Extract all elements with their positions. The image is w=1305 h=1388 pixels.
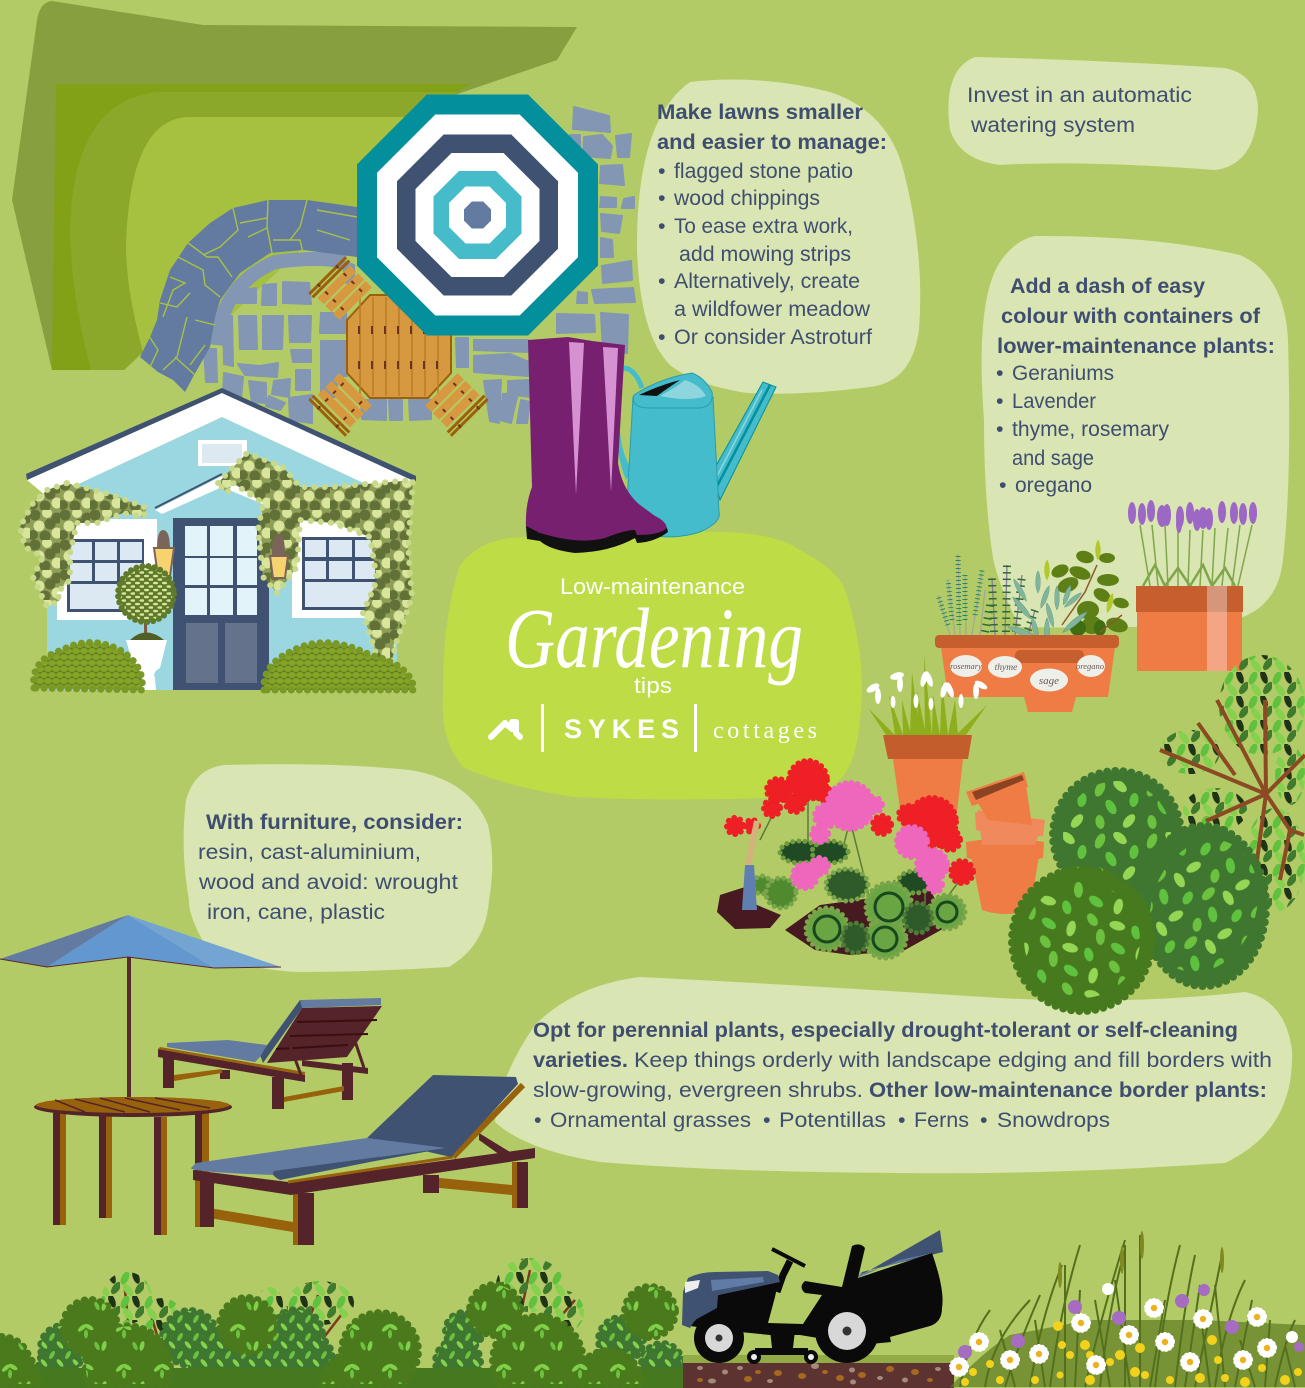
panel: perennial plants tip: •: [763, 1108, 771, 1132]
lawns list: •: [658, 186, 666, 210]
lawns heading: and easier to manage:: [657, 130, 887, 154]
sage: [1007, 571, 1089, 651]
logo: Sykes cottages: cottages: [713, 718, 817, 744]
shrub top: [1053, 771, 1181, 899]
ivy left: [20, 483, 147, 607]
soil: [717, 887, 950, 955]
illustration: rear sun lounger: [158, 998, 382, 1109]
panel: perennial plants tip: Snowdrops: [997, 1108, 1110, 1132]
foliage rosettes: [753, 841, 965, 958]
containers list: oregano: [1015, 473, 1092, 497]
containers list: Lavender: [1012, 389, 1096, 413]
lawns heading: [657, 100, 887, 154]
lawns list: Or consider Astroturf: [674, 325, 872, 349]
herb labels: oregano: [1076, 661, 1104, 671]
mower deck: [755, 1330, 808, 1355]
illustration: cottage: [20, 388, 416, 690]
lawn layers: [12, 1, 577, 370]
lawns list: add mowing strips: [679, 242, 851, 266]
trowel: [742, 821, 757, 910]
illustration: front sun lounger: [191, 1075, 535, 1245]
panel: furniture tip: resin, cast-aluminium,: [198, 840, 421, 864]
panel: perennial plants tip: [495, 977, 1292, 1173]
panel: watering system tip: watering system: [970, 113, 1135, 137]
door: [173, 518, 269, 690]
illustration: stacked terracotta pots: [966, 772, 1045, 914]
mower body: [690, 1244, 943, 1345]
panel: perennial plants tip: Ferns: [914, 1108, 969, 1132]
thyme: [985, 565, 1035, 635]
back bushes: [39, 1310, 682, 1384]
herb labels: [950, 655, 1105, 692]
lawns list: a wildfower meadow: [674, 297, 870, 321]
panel: perennial plants tip: •: [898, 1108, 906, 1132]
paving: pale stones: [204, 107, 635, 423]
oregano: [1049, 549, 1130, 636]
mower hood: [682, 1271, 780, 1328]
panel: furniture tip: iron, cane, plastic: [207, 900, 385, 924]
panel: furniture tip: With furniture, consider:: [206, 810, 463, 834]
lawns list: •: [658, 214, 666, 238]
lawns list: •: [658, 269, 666, 293]
garden table: [34, 1097, 232, 1235]
mower wheels: [694, 1299, 879, 1364]
lawns list: Alternatively, create: [674, 269, 860, 293]
panel: perennial plants tip: Ornamental grasses: [550, 1108, 751, 1132]
containers list: •: [996, 361, 1004, 385]
steering wheel: [772, 1249, 805, 1292]
daisies: [952, 1283, 1298, 1374]
herb labels: sage: [1039, 675, 1059, 687]
lantern right: [270, 534, 288, 578]
illustration: parasol and table: [0, 915, 281, 1235]
icon: wellington boots: [526, 337, 668, 553]
lawns list: •: [658, 159, 666, 183]
containers heading: Add a dash of easy: [1010, 274, 1205, 298]
illustration: ground strip: [683, 1355, 954, 1388]
illustration: tree: [1160, 655, 1305, 912]
meadow grasses: [960, 1235, 1295, 1387]
back bush leaves: [39, 1310, 682, 1384]
stems: [760, 790, 960, 905]
script title: Gardening: [505, 590, 803, 686]
terracotta trough: [941, 647, 1115, 697]
containers list: Geraniums: [1012, 361, 1114, 385]
lawns heading: Make lawns smaller: [657, 100, 864, 124]
panel: perennial plants tip: •: [534, 1108, 542, 1132]
containers list: •: [996, 389, 1004, 413]
shrubs at cottage front: [34, 642, 414, 690]
herb labels: rosemary: [950, 661, 982, 671]
logo: Sykes cottages: [491, 704, 817, 752]
panel: perennial plants tip: Opt for perennial plants, especially drought-tolerant or self-cleaning: [533, 1018, 1238, 1042]
shrub right: [1132, 824, 1276, 988]
title text: Low-maintenance: [560, 574, 745, 599]
illustration: snowdrops in pot: [865, 655, 989, 830]
panel: perennial plants tip: •: [980, 1108, 988, 1132]
panel: containers tip: [982, 236, 1289, 628]
red blooms: [727, 761, 973, 883]
containers heading: [997, 274, 1275, 358]
illustration: herb pots: [935, 540, 1130, 712]
ivy right: [218, 453, 413, 668]
panel: perennial plants tip: Other low-maintenance border plants:: [869, 1078, 1267, 1102]
parasol: [0, 915, 281, 1103]
containers list: and sage: [1012, 446, 1094, 470]
illustration: bottom hedge: [0, 1258, 683, 1388]
left window: [57, 519, 157, 620]
panel: watering system tip: Invest in an automatic: [967, 83, 1192, 107]
illustration: lavender in square pot: [1128, 500, 1257, 671]
containers heading: lower-maintenance plants:: [997, 334, 1275, 358]
title panel: [443, 532, 862, 800]
patio chairs: [308, 256, 489, 437]
right window: [292, 520, 390, 618]
panel: furniture tip: [184, 764, 492, 972]
yellow flowers: [961, 1321, 1302, 1387]
containers list: •: [999, 473, 1007, 497]
containers heading: colour with containers of: [1001, 304, 1261, 328]
shrub front: [1005, 863, 1159, 1017]
panel: watering system tip: [948, 57, 1258, 170]
illustration: wildflower meadow: [950, 1231, 1305, 1387]
front bush leaves: [0, 1285, 675, 1384]
hedge base: [0, 1368, 683, 1388]
patio table: [347, 295, 451, 398]
roof: [26, 388, 416, 514]
lawns list: To ease extra work,: [674, 214, 853, 238]
illustration: geraniums: [717, 761, 973, 958]
lawns list: wood chippings: [673, 186, 820, 210]
containers list: thyme, rosemary: [1012, 417, 1169, 441]
lawns list: flagged stone patio: [674, 159, 853, 183]
containers list: [996, 361, 1169, 497]
lounger frame: [193, 1085, 535, 1245]
panel: perennial plants tip: varieties.: [533, 1048, 628, 1072]
containers list: •: [996, 417, 1004, 441]
topiary in white urn: [118, 566, 174, 690]
patio umbrella seen from above: [357, 94, 598, 336]
lounger cushions: [367, 1075, 518, 1157]
icon: watering can: [618, 368, 776, 537]
panel: perennial plants tip: slow-growing, evergreen shrubs.: [533, 1078, 863, 1102]
panel: lawns tip: [637, 80, 920, 394]
herb labels: thyme: [995, 663, 1017, 673]
logo: Sykes cottages: SYKES: [564, 714, 679, 744]
lawns list: [658, 159, 872, 349]
rosemary: [938, 554, 985, 635]
hedge tree tops: [102, 1258, 584, 1345]
pink blooms: [793, 783, 947, 892]
panel: perennial plants tip: Potentillas: [779, 1108, 886, 1132]
front bushes: [0, 1285, 675, 1384]
lawns list: •: [658, 325, 666, 349]
front pot: [1022, 662, 1078, 712]
panel: furniture tip: wood and avoid: wrought: [198, 870, 458, 894]
purple flowers: [958, 1284, 1304, 1359]
panel: perennial plants tip: Keep things orderly with landscape edging and fill borders with: [634, 1048, 1272, 1072]
illustration: shrubs: [1005, 771, 1276, 1017]
illustration: ride-on mower: [682, 1230, 943, 1364]
paving: dark stone arch: [140, 200, 357, 392]
subtitle: tips: [634, 673, 672, 698]
lantern left: [154, 530, 174, 576]
mower catcher lid: [858, 1230, 943, 1277]
